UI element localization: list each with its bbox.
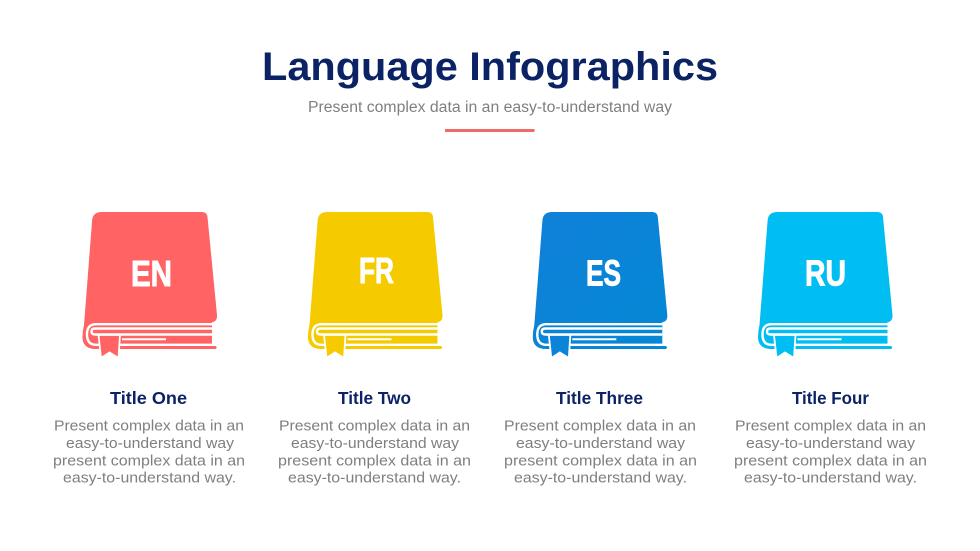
- text block: description three: Present complex data in an: [504, 418, 696, 434]
- text block: description four: easy-to-understand way: [746, 436, 916, 452]
- text block: description three: [504, 418, 697, 486]
- label: EN: EN: [131, 253, 172, 294]
- text block: description one: Present complex data in an: [54, 418, 244, 434]
- heading: Title Four: Title Four: [792, 388, 869, 408]
- text block: description four: easy-to-understand way.: [744, 470, 917, 486]
- text block: description four: [734, 418, 927, 486]
- heading: Title One: Title One: [110, 388, 187, 408]
- icon: book EN: [82, 212, 217, 358]
- label: ES: ES: [586, 252, 621, 294]
- text block: description four: present complex data in an: [734, 454, 927, 470]
- text block: description one: present complex data in an: [53, 454, 245, 470]
- text block: description three: present complex data in an: [504, 454, 697, 470]
- text block: description three: easy-to-understand way: [516, 436, 686, 452]
- accent rule: [445, 129, 534, 132]
- text block: description two: present complex data in an: [278, 454, 471, 470]
- text block: description two: easy-to-understand way.: [288, 470, 461, 486]
- label: RU: RU: [805, 252, 846, 294]
- heading: Title Two: Title Two: [338, 388, 411, 408]
- icon: book ES: [533, 212, 667, 358]
- text block: description two: [278, 418, 471, 486]
- text block: description two: easy-to-understand way: [291, 436, 460, 452]
- text block: description three: easy-to-understand way.: [514, 470, 687, 486]
- text block: description one: [53, 418, 245, 486]
- subtitle: Present complex data in an easy-to-understand way: [308, 99, 672, 116]
- label: FR: FR: [359, 250, 394, 291]
- heading: Title Three: Title Three: [556, 388, 643, 408]
- panel: Russian: [734, 212, 927, 486]
- icon: book FR: [308, 212, 443, 358]
- text block: description one: easy-to-understand way: [66, 436, 235, 452]
- text block: description one: easy-to-understand way.: [63, 470, 236, 486]
- title: Language Infographics: [262, 45, 718, 89]
- text block: description two: Present complex data in an: [279, 418, 470, 434]
- panel: Spanish: [504, 212, 697, 486]
- icon: book RU: [758, 212, 893, 358]
- panel: French: [278, 212, 471, 486]
- text block: description four: Present complex data in an: [735, 418, 926, 434]
- panel: English: [53, 212, 245, 486]
